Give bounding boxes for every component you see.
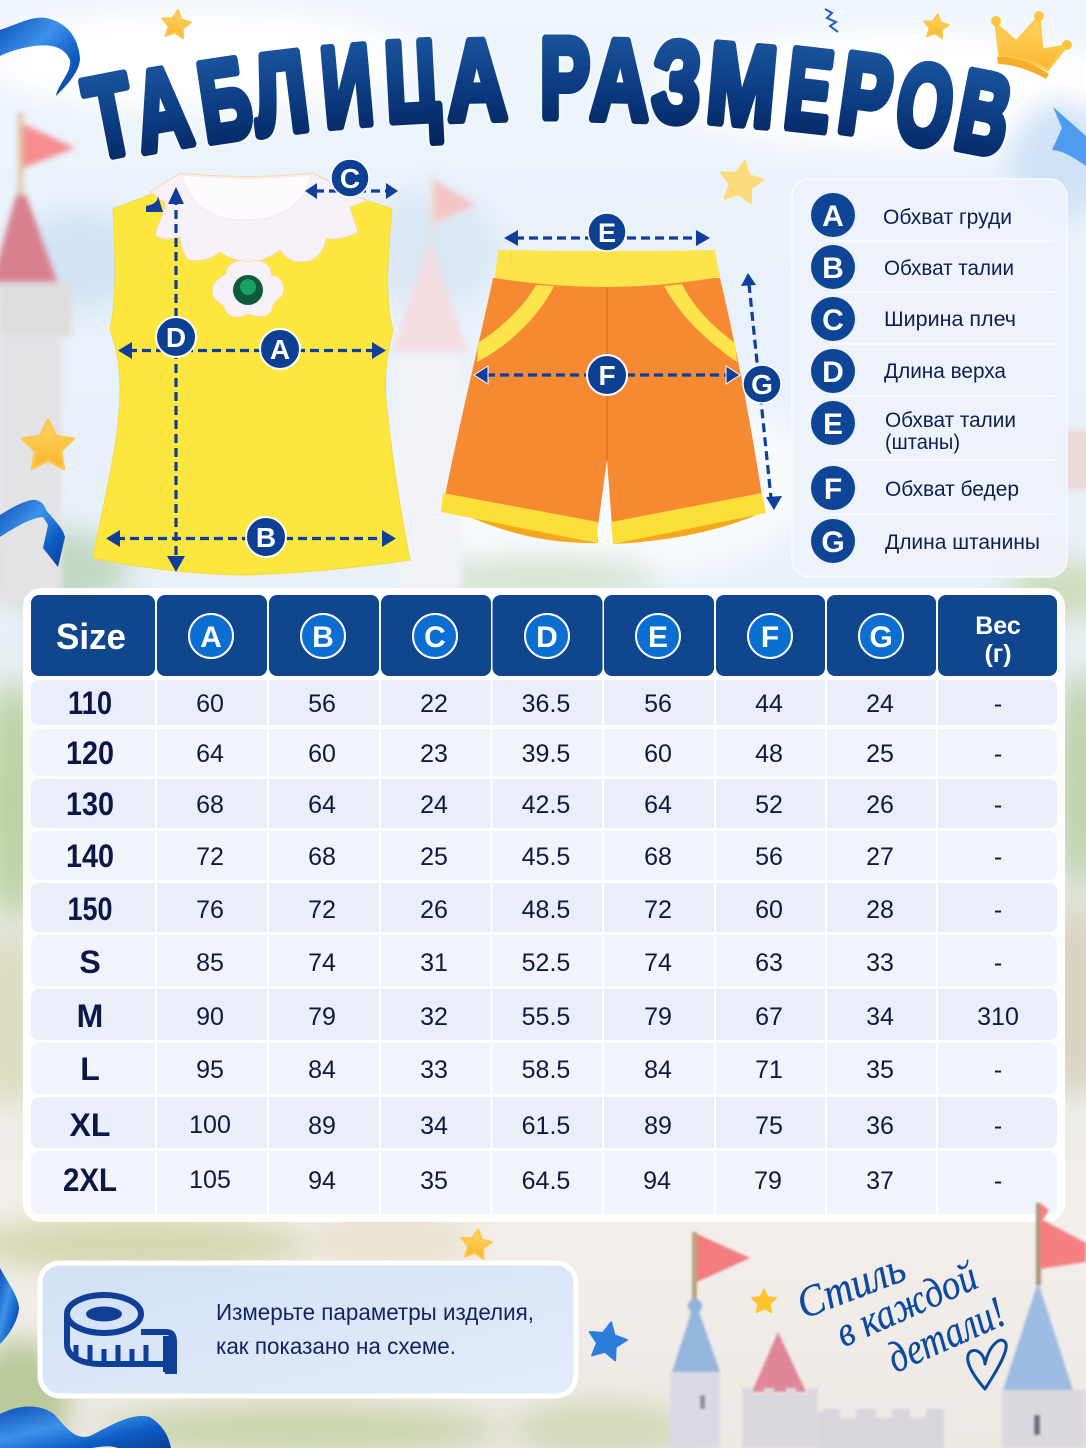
row L: 58.5 [522, 1056, 570, 1084]
measure line F [486, 373, 728, 377]
legend item G: Длина штанины [885, 531, 1040, 554]
row S: 74 [644, 949, 672, 977]
shorts hem underside [445, 505, 764, 544]
row L: L [80, 1051, 100, 1087]
row 150 [31, 883, 1057, 932]
badge B: B [256, 522, 276, 553]
row 110 [31, 680, 1057, 725]
row L: 84 [308, 1056, 336, 1084]
row 110: 24 [866, 690, 894, 718]
badge E [588, 213, 626, 251]
row 2XL: 37 [866, 1167, 894, 1195]
title: ТАБЛИЦА РАЗМЕРОВ: А [125, 43, 200, 176]
title: ТАБЛИЦА РАЗМЕРОВ: М [703, 19, 781, 151]
row 120: - [994, 740, 1002, 768]
row 110: 56 [308, 690, 336, 718]
title: ТАБЛИЦА РАЗМЕРОВ: Е [779, 25, 839, 155]
row 140: 68 [308, 843, 336, 871]
row M: 90 [196, 1003, 224, 1031]
row 120 [31, 729, 1057, 776]
row M: 79 [644, 1003, 672, 1031]
row 120: 120 [66, 735, 114, 771]
row L: 71 [755, 1056, 783, 1084]
shorts left cuff [441, 493, 598, 543]
row XL: 89 [644, 1112, 672, 1140]
measure line G [749, 284, 771, 498]
row M: 310 [977, 1003, 1019, 1031]
table header: B [312, 621, 334, 654]
row XL [31, 1097, 1057, 1148]
panel: legend [792, 179, 1067, 577]
legend item F: F [824, 473, 842, 506]
title: ТАБЛИЦА РАЗМЕРОВ: Ц [382, 18, 442, 146]
shorts body [445, 278, 762, 526]
badge E: E [598, 218, 616, 248]
title: ТАБЛИЦА РАЗМЕРОВ: И [316, 21, 378, 151]
row M: M [77, 998, 103, 1034]
row 110: 36.5 [522, 690, 570, 718]
table header: G [869, 621, 893, 654]
row L: 35 [866, 1056, 894, 1084]
panel: measuring tip: как показано на схеме. [216, 1333, 456, 1359]
row 110: 56 [644, 690, 672, 718]
right pocket trim [664, 284, 737, 362]
slogan: handwritten text: детали! [879, 1287, 1013, 1382]
row 150: 72 [308, 896, 336, 924]
legend item D [811, 349, 1006, 393]
title: ТАБЛИЦА РАЗМЕРОВ: В [947, 46, 1021, 180]
row 140: 25 [420, 843, 448, 871]
icon: crown [991, 11, 1072, 79]
slogan: handwritten text: в каждой [829, 1254, 985, 1357]
row 150: 28 [866, 896, 894, 924]
measure line C [315, 189, 388, 193]
arrowheads [474, 230, 782, 510]
legend item D: Длина верха [884, 360, 1006, 383]
row 120: 48 [755, 740, 783, 768]
title: ТАБЛИЦА РАЗМЕРОВ: А [446, 16, 508, 144]
badge B [246, 517, 286, 557]
squiggle [825, 9, 838, 32]
star: left [22, 420, 74, 469]
row L: - [994, 1056, 1002, 1084]
arrowheads [106, 183, 398, 572]
star: small gold bottom [752, 1289, 776, 1313]
row L: 95 [196, 1056, 224, 1084]
row 120: 39.5 [522, 740, 570, 768]
badge F [587, 355, 627, 395]
row S: 63 [755, 949, 783, 977]
row XL: 34 [420, 1112, 448, 1140]
row 110: - [994, 690, 1002, 718]
row 2XL: - [994, 1167, 1002, 1195]
row 140: 45.5 [522, 843, 570, 871]
table header [31, 595, 1057, 676]
row XL: 36 [866, 1112, 894, 1140]
table header: F [761, 621, 779, 654]
row M [31, 989, 1057, 1040]
badge A [260, 329, 300, 369]
row 140: 140 [66, 838, 114, 874]
legend item B: Обхват талии [884, 257, 1014, 280]
legend item E: Обхват талии [885, 409, 1016, 432]
shorts right cuff [611, 493, 766, 544]
row 2XL: 64.5 [522, 1167, 570, 1195]
garment: top with measurements [93, 159, 410, 575]
star: top right [922, 12, 950, 39]
row 150: 76 [196, 896, 224, 924]
table header: (г) [984, 640, 1012, 668]
legend item E: (штаны) [885, 431, 960, 454]
row 130 [31, 779, 1057, 828]
table header: D [536, 621, 558, 654]
row 2XL: 94 [308, 1167, 336, 1195]
row 140: 68 [644, 843, 672, 871]
row S: 31 [420, 949, 448, 977]
shorts waistband [495, 250, 720, 287]
legend item F: Обхват бедер [885, 478, 1019, 501]
row XL: 75 [755, 1112, 783, 1140]
row 120: 23 [420, 740, 448, 768]
panel: size table [23, 588, 1065, 1222]
shirt flower with gem [212, 261, 284, 317]
row 150: 48.5 [522, 896, 570, 924]
ribbon: left bottom [0, 1268, 19, 1344]
row XL: XL [70, 1107, 110, 1143]
row 110: 22 [420, 690, 448, 718]
row 120: 64 [196, 740, 224, 768]
title: ТАБЛИЦА РАЗМЕРОВ: О [888, 38, 962, 172]
row 2XL [31, 1151, 1057, 1214]
row 130: - [994, 791, 1002, 819]
row 130: 64 [308, 791, 336, 819]
star: near legend [717, 158, 765, 204]
legend item C: C [822, 304, 844, 337]
row 2XL: 2XL [63, 1162, 117, 1198]
title: ТАБЛИЦА РАЗМЕРОВ: З [650, 19, 704, 147]
table header: C [424, 621, 446, 654]
badge D: D [166, 322, 186, 353]
row 150: 60 [755, 896, 783, 924]
row 140: - [994, 843, 1002, 871]
row 140: 56 [755, 843, 783, 871]
row S: 33 [866, 949, 894, 977]
legend item C: Ширина плеч [884, 308, 1016, 331]
row L: 84 [644, 1056, 672, 1084]
row XL: 89 [308, 1112, 336, 1140]
legend item G: G [821, 526, 845, 559]
row 130: 52 [755, 791, 783, 819]
badge A: A [270, 334, 290, 365]
title: ТАБЛИЦА РАЗМЕРОВ: А [589, 16, 651, 144]
row 140 [31, 831, 1057, 880]
row 150: 72 [644, 896, 672, 924]
title: ТАБЛИЦА РАЗМЕРОВ: Б [191, 34, 259, 166]
title: ТАБЛИЦА РАЗМЕРОВ: Т [76, 50, 145, 183]
slogan: handwritten text: Стиль [790, 1243, 912, 1328]
row 2XL: 94 [643, 1167, 671, 1195]
star: blue [585, 1318, 630, 1362]
ribbon: top right [1052, 107, 1086, 166]
row 140: 72 [196, 843, 224, 871]
legend item F [811, 466, 1019, 510]
table header: Size [56, 616, 126, 657]
flag: right castle tower [1036, 1203, 1086, 1285]
panel: measuring tip [40, 1263, 576, 1396]
row 120: 25 [866, 740, 894, 768]
row 150: 150 [68, 891, 112, 927]
legend item B [811, 245, 1014, 289]
row 110: 110 [68, 685, 112, 721]
row 130: 26 [866, 791, 894, 819]
row M: 67 [755, 1003, 783, 1031]
row 120: 60 [644, 740, 672, 768]
shirt collar [150, 173, 367, 262]
legend item C [811, 297, 1016, 341]
slogan: handwritten text [790, 1243, 1013, 1382]
legend item A: Обхват груди [883, 206, 1012, 229]
ribbon: left middle [0, 500, 65, 567]
legend item D: D [822, 356, 844, 389]
row M: 79 [308, 1003, 336, 1031]
title: ТАБЛИЦА РАЗМЕРОВ: Р [540, 15, 590, 142]
row 130: 68 [196, 791, 224, 819]
row 150: - [994, 896, 1002, 924]
legend item B: B [822, 252, 844, 285]
legend item E: E [823, 408, 843, 441]
legend item G [811, 519, 1040, 563]
title: ТАБЛИЦА РАЗМЕРОВ: Л [246, 29, 315, 159]
shirt body [93, 178, 410, 575]
title: ТАБЛИЦА РАЗМЕРОВ: Р [832, 30, 900, 162]
legend item A: A [822, 200, 844, 233]
legend item A [811, 193, 1012, 237]
badge F: F [598, 360, 616, 391]
row 130: 24 [420, 791, 448, 819]
row 2XL: 79 [754, 1167, 782, 1195]
garment: shorts with measurements [441, 213, 782, 544]
row 130: 64 [644, 791, 672, 819]
title: ТАБЛИЦА РАЗМЕРОВ [76, 15, 1021, 183]
legend item E [811, 401, 1016, 454]
row S: 85 [196, 949, 224, 977]
icon: heart [968, 1340, 1006, 1389]
row S: - [994, 949, 1002, 977]
row L: 33 [420, 1056, 448, 1084]
row S: S [79, 944, 101, 980]
left pocket trim [477, 285, 554, 362]
measure line A [128, 349, 376, 352]
table header: Вес [975, 612, 1021, 640]
row XL: 100 [189, 1111, 231, 1139]
row XL: 61.5 [522, 1112, 570, 1140]
row M: 55.5 [522, 1003, 570, 1031]
row 150: 26 [420, 896, 448, 924]
badge D [156, 317, 196, 357]
row S: 74 [308, 949, 336, 977]
table header: A [200, 621, 222, 654]
row XL: - [994, 1112, 1002, 1140]
row 2XL: 35 [420, 1167, 448, 1195]
row 130: 42.5 [522, 791, 570, 819]
row 110: 44 [755, 690, 783, 718]
measure line E [515, 236, 699, 240]
row M: 34 [866, 1003, 894, 1031]
badge C [331, 159, 369, 197]
table header: E [648, 621, 668, 654]
badge G [743, 365, 781, 403]
row S: 52.5 [522, 949, 570, 977]
badge G: G [751, 369, 773, 400]
row S [31, 935, 1057, 986]
row 120: 60 [308, 740, 336, 768]
row 110: 60 [196, 690, 224, 718]
row L [31, 1043, 1057, 1094]
badge C: C [340, 163, 360, 194]
row M: 32 [420, 1003, 448, 1031]
measure line D [174, 196, 178, 562]
ribbon: top left [0, 18, 80, 96]
icon: measuring tape [67, 1295, 176, 1372]
tip text: Измерьте параметры изделия, [216, 1299, 534, 1325]
measure line B [116, 537, 386, 540]
row 130: 130 [66, 786, 114, 822]
star: above tip [459, 1227, 493, 1260]
row 2XL: 105 [189, 1166, 231, 1194]
row 140: 27 [866, 843, 894, 871]
star: top left [160, 8, 192, 39]
ribbon: bottom [0, 1406, 171, 1448]
